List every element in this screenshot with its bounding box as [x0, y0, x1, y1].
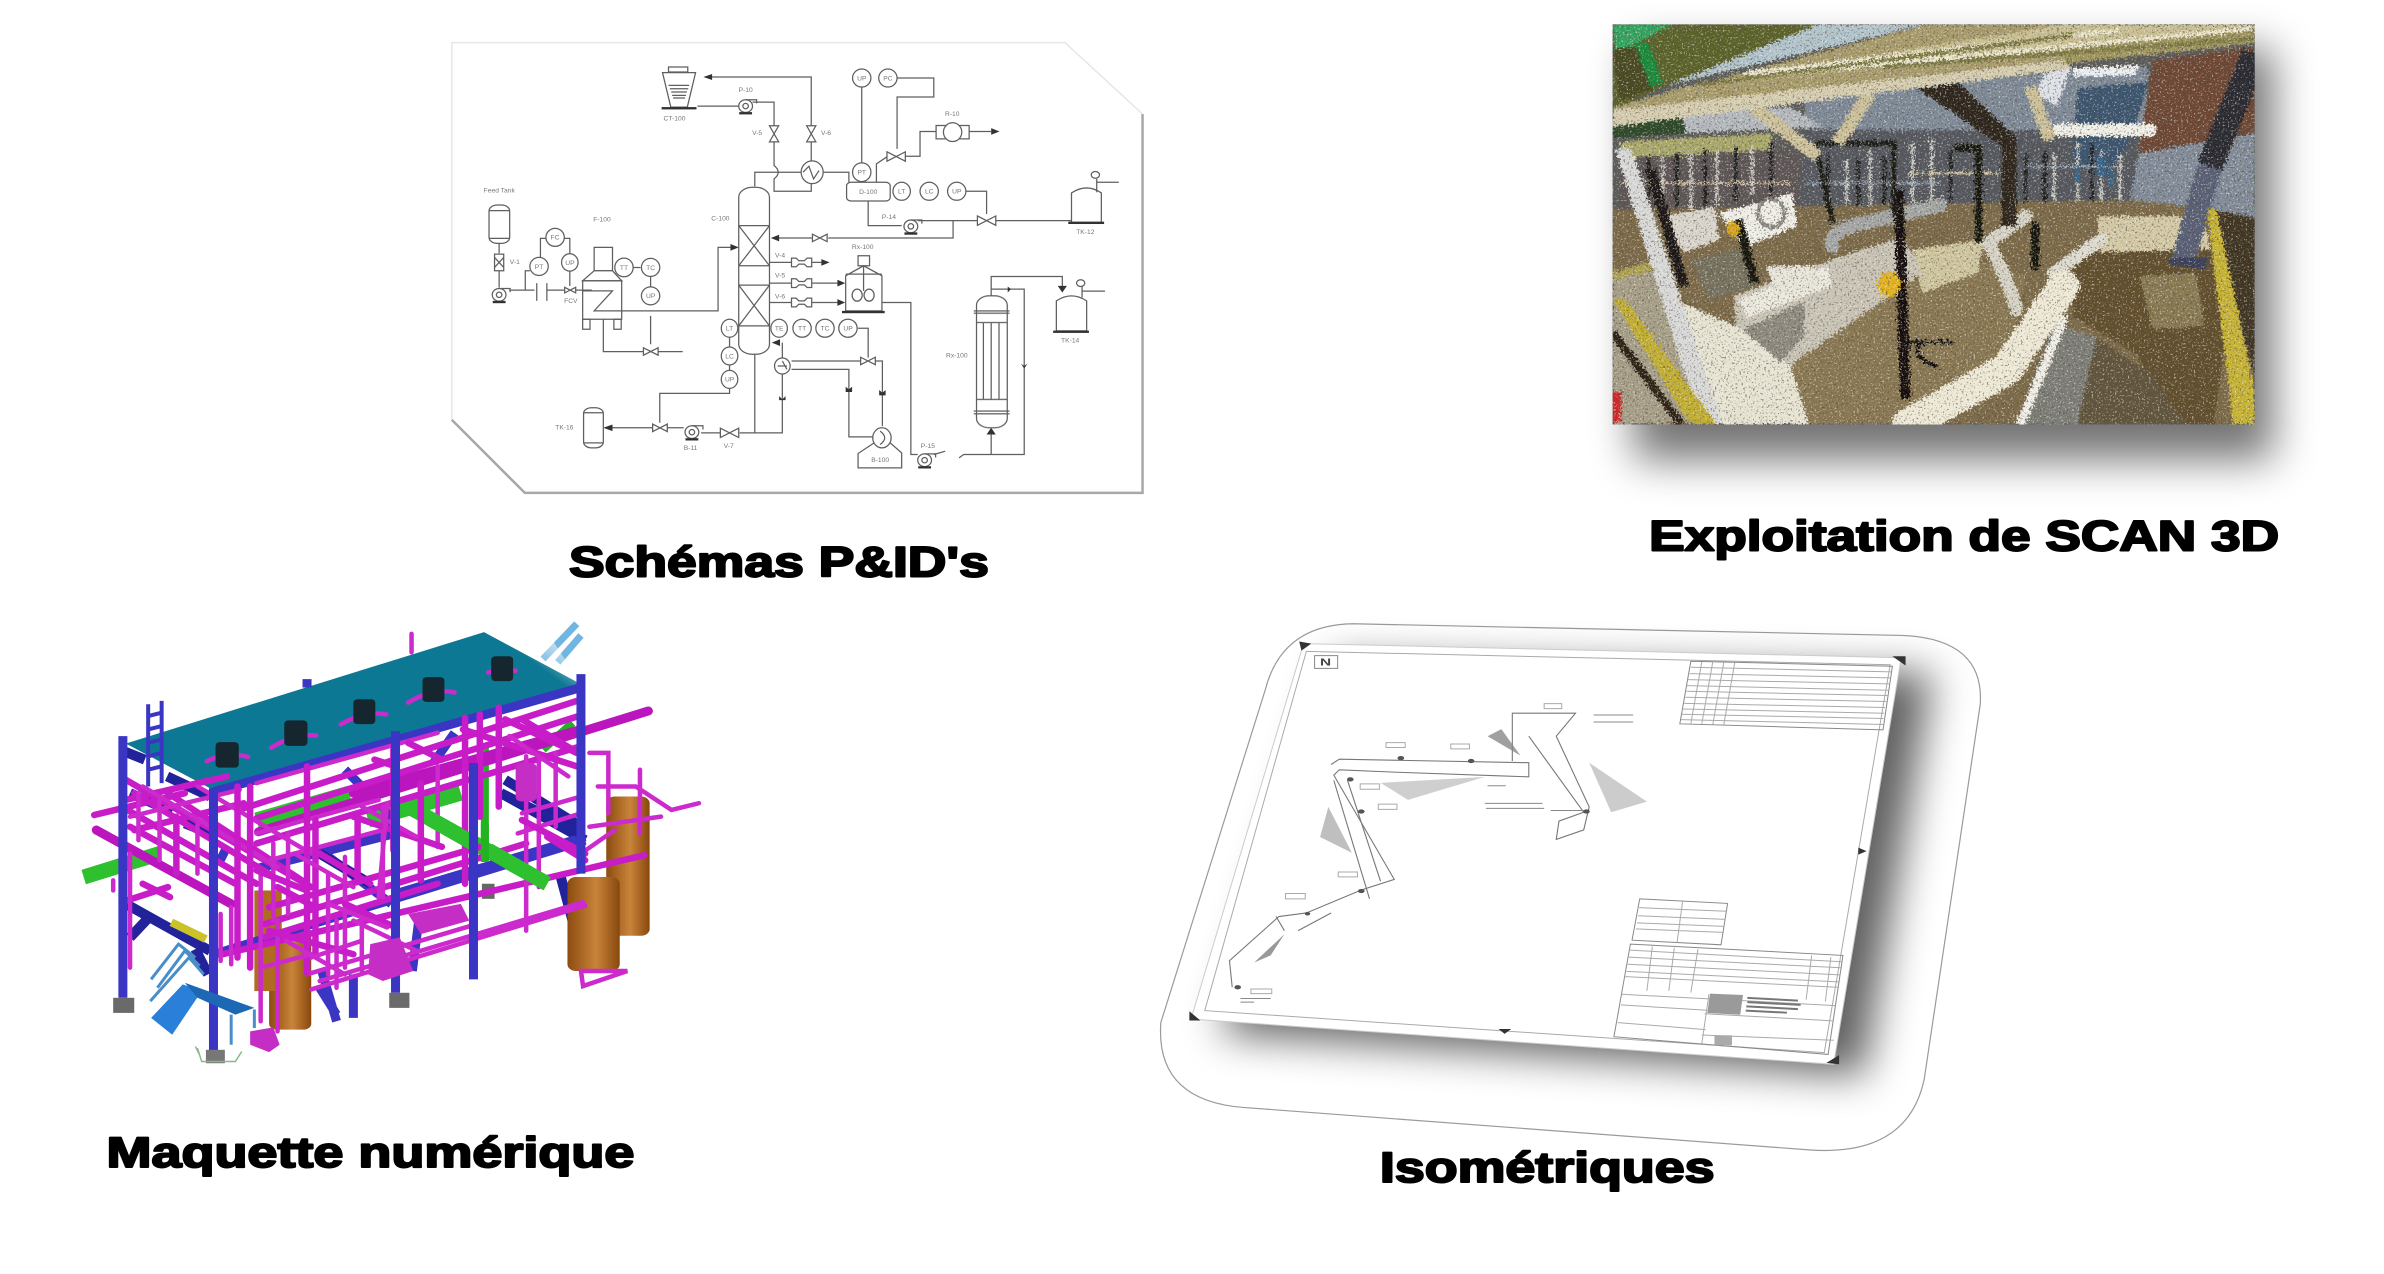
material table [1632, 899, 1728, 945]
valves and pumps [492, 100, 996, 469]
stairs and platform [150, 944, 254, 1045]
compressor: R-10 [945, 111, 960, 118]
instruments: UP [565, 260, 575, 267]
reboiler [684, 87, 935, 468]
busy background pipework [1620, 137, 2120, 210]
distillation column [711, 187, 769, 354]
tilted sheet [1189, 641, 1906, 1064]
drop shadow [1634, 49, 2273, 459]
storage tanks: TK-14 [1061, 338, 1080, 345]
sheet linework [1229, 656, 1892, 1054]
feed tank [484, 187, 578, 305]
reboiler: B-100 [871, 457, 889, 464]
storage tanks: TK-16 [555, 424, 574, 431]
ventilation stacks [207, 656, 516, 768]
instruments: LC [925, 189, 934, 196]
instruments [530, 69, 966, 388]
furnace [583, 216, 622, 329]
reboiler: P-14 [882, 214, 896, 221]
heat exchanger [801, 161, 823, 184]
feed tank: Feed Tank [484, 187, 515, 194]
feed tank: V-1 [510, 259, 520, 266]
instruments: TE [775, 326, 784, 333]
revision table [1680, 661, 1892, 730]
instruments: UP [725, 377, 735, 384]
reboiler: V-5 [752, 130, 762, 137]
panel: P&ID schematic [452, 43, 1143, 493]
magenta piping [94, 701, 699, 1031]
heading: digital model: Maquette numérique [106, 1129, 634, 1177]
point cloud light speckle [1613, 24, 2255, 424]
instruments: UP [952, 189, 962, 196]
panel: 3D model [84, 624, 699, 1063]
instruments: PT [857, 170, 866, 177]
instruments: UP [646, 293, 656, 300]
reboiler: V-6 [821, 130, 831, 137]
distillation column: C-100 [711, 216, 730, 223]
yellow beam [171, 922, 206, 939]
steel columns [1613, 54, 2255, 425]
heading: 3D scan: Exploitation de SCAN 3D [1649, 513, 2279, 561]
panel: 3D scan image [1592, 10, 2276, 459]
storage tanks: TK-12 [1076, 229, 1095, 236]
point cloud scene [1612, 24, 2255, 424]
green ducts [84, 723, 573, 884]
axis marker [195, 1046, 242, 1062]
compressor [936, 111, 969, 141]
reboiler: B-11 [684, 445, 698, 452]
reboiler: V-7 [724, 443, 734, 450]
machinery and pipes [1663, 130, 2151, 425]
instruments: UP [857, 75, 867, 82]
yellow hoists and details [1613, 221, 2207, 422]
sheet shadow [1221, 662, 1932, 1076]
instruments: LC [725, 353, 734, 360]
reboiler: P-10 [739, 87, 753, 94]
equipment boxes [250, 763, 537, 1052]
reflux drum [847, 182, 890, 201]
sheet with cut corners [452, 43, 1143, 493]
hatched areas [1254, 729, 1647, 962]
rounded frame [1160, 624, 1980, 1150]
reactor vessel [842, 244, 885, 313]
heading: P&ID schematics: Schémas P&ID's [569, 539, 989, 587]
roof and sky [1613, 24, 2255, 127]
cooling tower: CT-100 [664, 115, 686, 122]
instruments: LT [726, 326, 733, 333]
instruments: PT [535, 264, 543, 271]
instruments: LT [898, 189, 905, 196]
reflux drum: D-100 [859, 189, 878, 196]
front steel columns [123, 674, 581, 1051]
far structure [412, 624, 585, 921]
instruments: TC [821, 326, 830, 333]
reboiler: V-6 [775, 294, 785, 301]
reboiler: V-5 [775, 272, 785, 279]
reboiler: P-15 [921, 443, 935, 450]
instruments: PC [883, 75, 893, 82]
instruments: FC [551, 235, 560, 242]
instruments: TT [620, 265, 628, 272]
point cloud dark speckle [1613, 24, 2255, 424]
furnace: F-100 [593, 216, 611, 223]
instruments: UP [843, 326, 853, 333]
background walls [1613, 47, 2255, 216]
cooling tower [662, 67, 696, 122]
title block [1614, 944, 1843, 1054]
piping network [499, 74, 1071, 458]
north mark: N [1320, 656, 1331, 668]
pipe routing [1229, 713, 1589, 987]
floor [1613, 200, 2255, 425]
north mark [1315, 656, 1338, 668]
instruments: TT [798, 326, 806, 333]
storage tanks [555, 172, 1119, 448]
roof deck [126, 629, 581, 790]
blue steel frame [124, 679, 585, 1021]
orange vessels [254, 797, 650, 1030]
reboiler: V-4 [775, 252, 785, 259]
base backdrop [1612, 24, 2255, 424]
feed tank: FCV [564, 298, 578, 305]
heading: isometrics: Isométriques [1380, 1144, 1715, 1192]
green ducts in front [429, 818, 547, 884]
shell and tube exchanger [946, 296, 1010, 428]
panel: isometric drawing [1160, 624, 1980, 1150]
reactor vessel: Rx-100 [852, 244, 874, 251]
shell and tube exchanger: Rx-100 [946, 353, 968, 360]
concrete footings [113, 993, 409, 1063]
pipe fittings and callouts [1234, 704, 1633, 1002]
instruments: TC [646, 265, 655, 272]
process diagram [484, 67, 1119, 469]
